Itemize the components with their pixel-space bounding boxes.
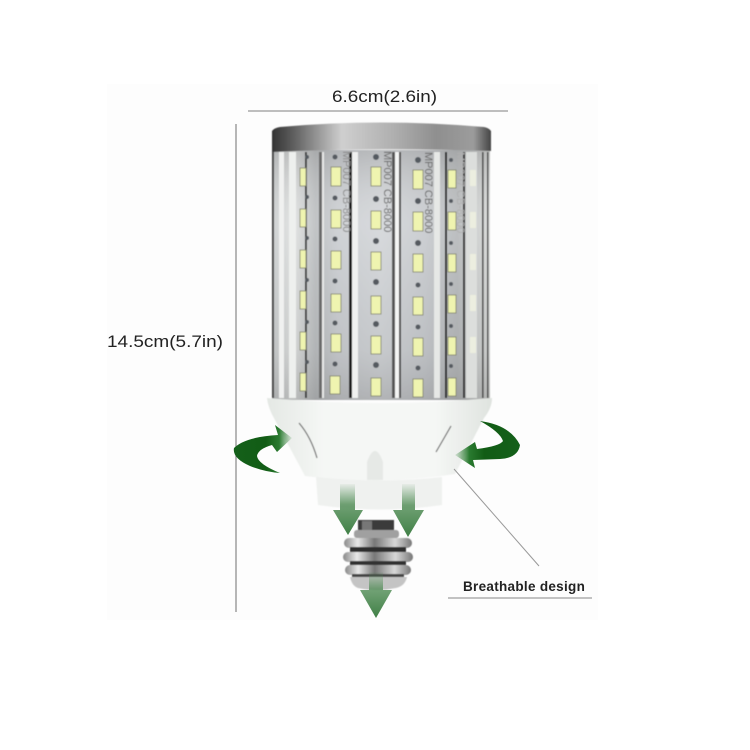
collar (316, 477, 442, 510)
white base (267, 398, 492, 481)
LED chips (300, 167, 476, 397)
left rotating airflow arrow (234, 425, 292, 473)
PCB print text: MP007 CB-8000 (422, 152, 434, 233)
corn LED bulb (267, 122, 492, 590)
callout: breathable design (448, 469, 592, 598)
top cap (272, 122, 491, 152)
PCB print text: MP007 CB-8000 (454, 152, 466, 233)
screw base (343, 520, 413, 590)
down airflow arrow right (393, 484, 424, 537)
callout: breathable design: Breathable design (463, 579, 585, 594)
height dimension: 14.5cm(5.7in) (107, 332, 223, 351)
down airflow arrow bottom (360, 572, 392, 618)
vent holes (305, 154, 453, 370)
base vents (299, 423, 451, 480)
right rotating airflow arrow (455, 421, 520, 468)
background panel (107, 84, 598, 620)
PCB print text: MP007 CB-8000 (381, 151, 393, 232)
PCB print text (340, 151, 466, 233)
PCB print text: MP007 CB-8000 (340, 151, 352, 232)
aluminium body (272, 150, 490, 400)
width dimension: 6.6cm(2.6in) (332, 88, 437, 106)
down airflow arrow left (333, 484, 363, 535)
